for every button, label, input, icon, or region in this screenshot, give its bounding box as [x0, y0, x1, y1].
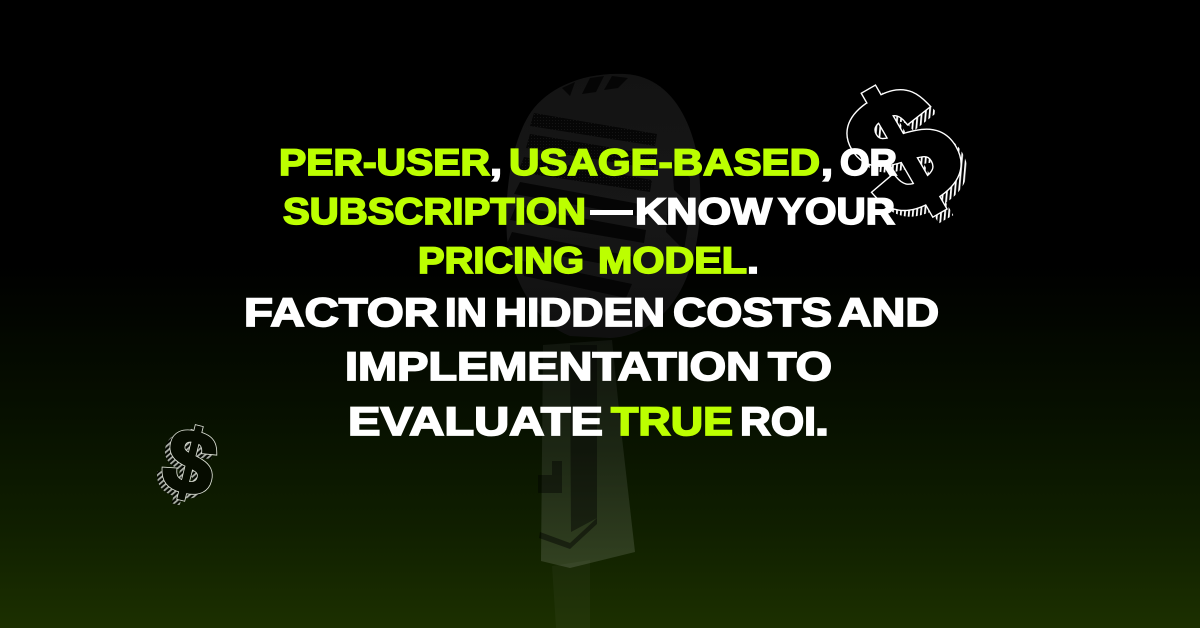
line 3 — [418, 240, 759, 281]
line 2: KNOW — [635, 191, 772, 232]
microphone body — [541, 340, 635, 568]
line 4: COSTS — [673, 291, 832, 335]
line 6: . — [815, 400, 829, 444]
line 1: PER-USER — [279, 142, 490, 183]
line 4 — [244, 291, 939, 335]
line 4: FACTOR — [244, 291, 438, 335]
line 3: PRICING — [418, 240, 584, 281]
microphone head — [506, 74, 700, 338]
line 6: ROI — [740, 400, 816, 444]
icon: large dollar sign: $ — [817, 47, 989, 254]
line 2: SUBSCRIPTION — [283, 191, 586, 232]
icon: small dollar sign: $ — [153, 408, 226, 518]
line 2: YOUR — [778, 191, 895, 232]
microphone background photo — [506, 74, 700, 628]
line 6 — [348, 400, 829, 444]
microphone switch — [538, 461, 562, 493]
icon: large dollar sign: $ — [823, 53, 995, 260]
line 5: TO — [768, 345, 832, 389]
line 1: , — [490, 142, 502, 183]
line 1: OR — [840, 142, 897, 183]
line 3: MODEL — [598, 240, 747, 281]
icon: small dollar sign: $ — [153, 408, 226, 518]
line 2 — [283, 191, 895, 232]
line 1 — [279, 142, 897, 183]
line 5: IMPLEMENTATION — [345, 345, 760, 389]
line 1: USAGE-BASED — [509, 142, 820, 183]
line 6: EVALUATE — [348, 400, 603, 444]
line 4: AND — [838, 291, 939, 335]
icon: large dollar sign: $ — [817, 47, 989, 254]
line 1: , — [821, 142, 833, 183]
headline text — [244, 142, 939, 444]
microphone neck — [552, 560, 590, 628]
microphone grip stripe — [570, 345, 597, 532]
line 6: TRUE — [611, 400, 733, 444]
line 4: HIDDEN — [495, 291, 665, 335]
line 3: . — [747, 240, 759, 281]
microphone collar — [539, 518, 597, 549]
line 4: IN — [445, 291, 487, 335]
icon: small dollar sign: $ — [148, 412, 221, 522]
